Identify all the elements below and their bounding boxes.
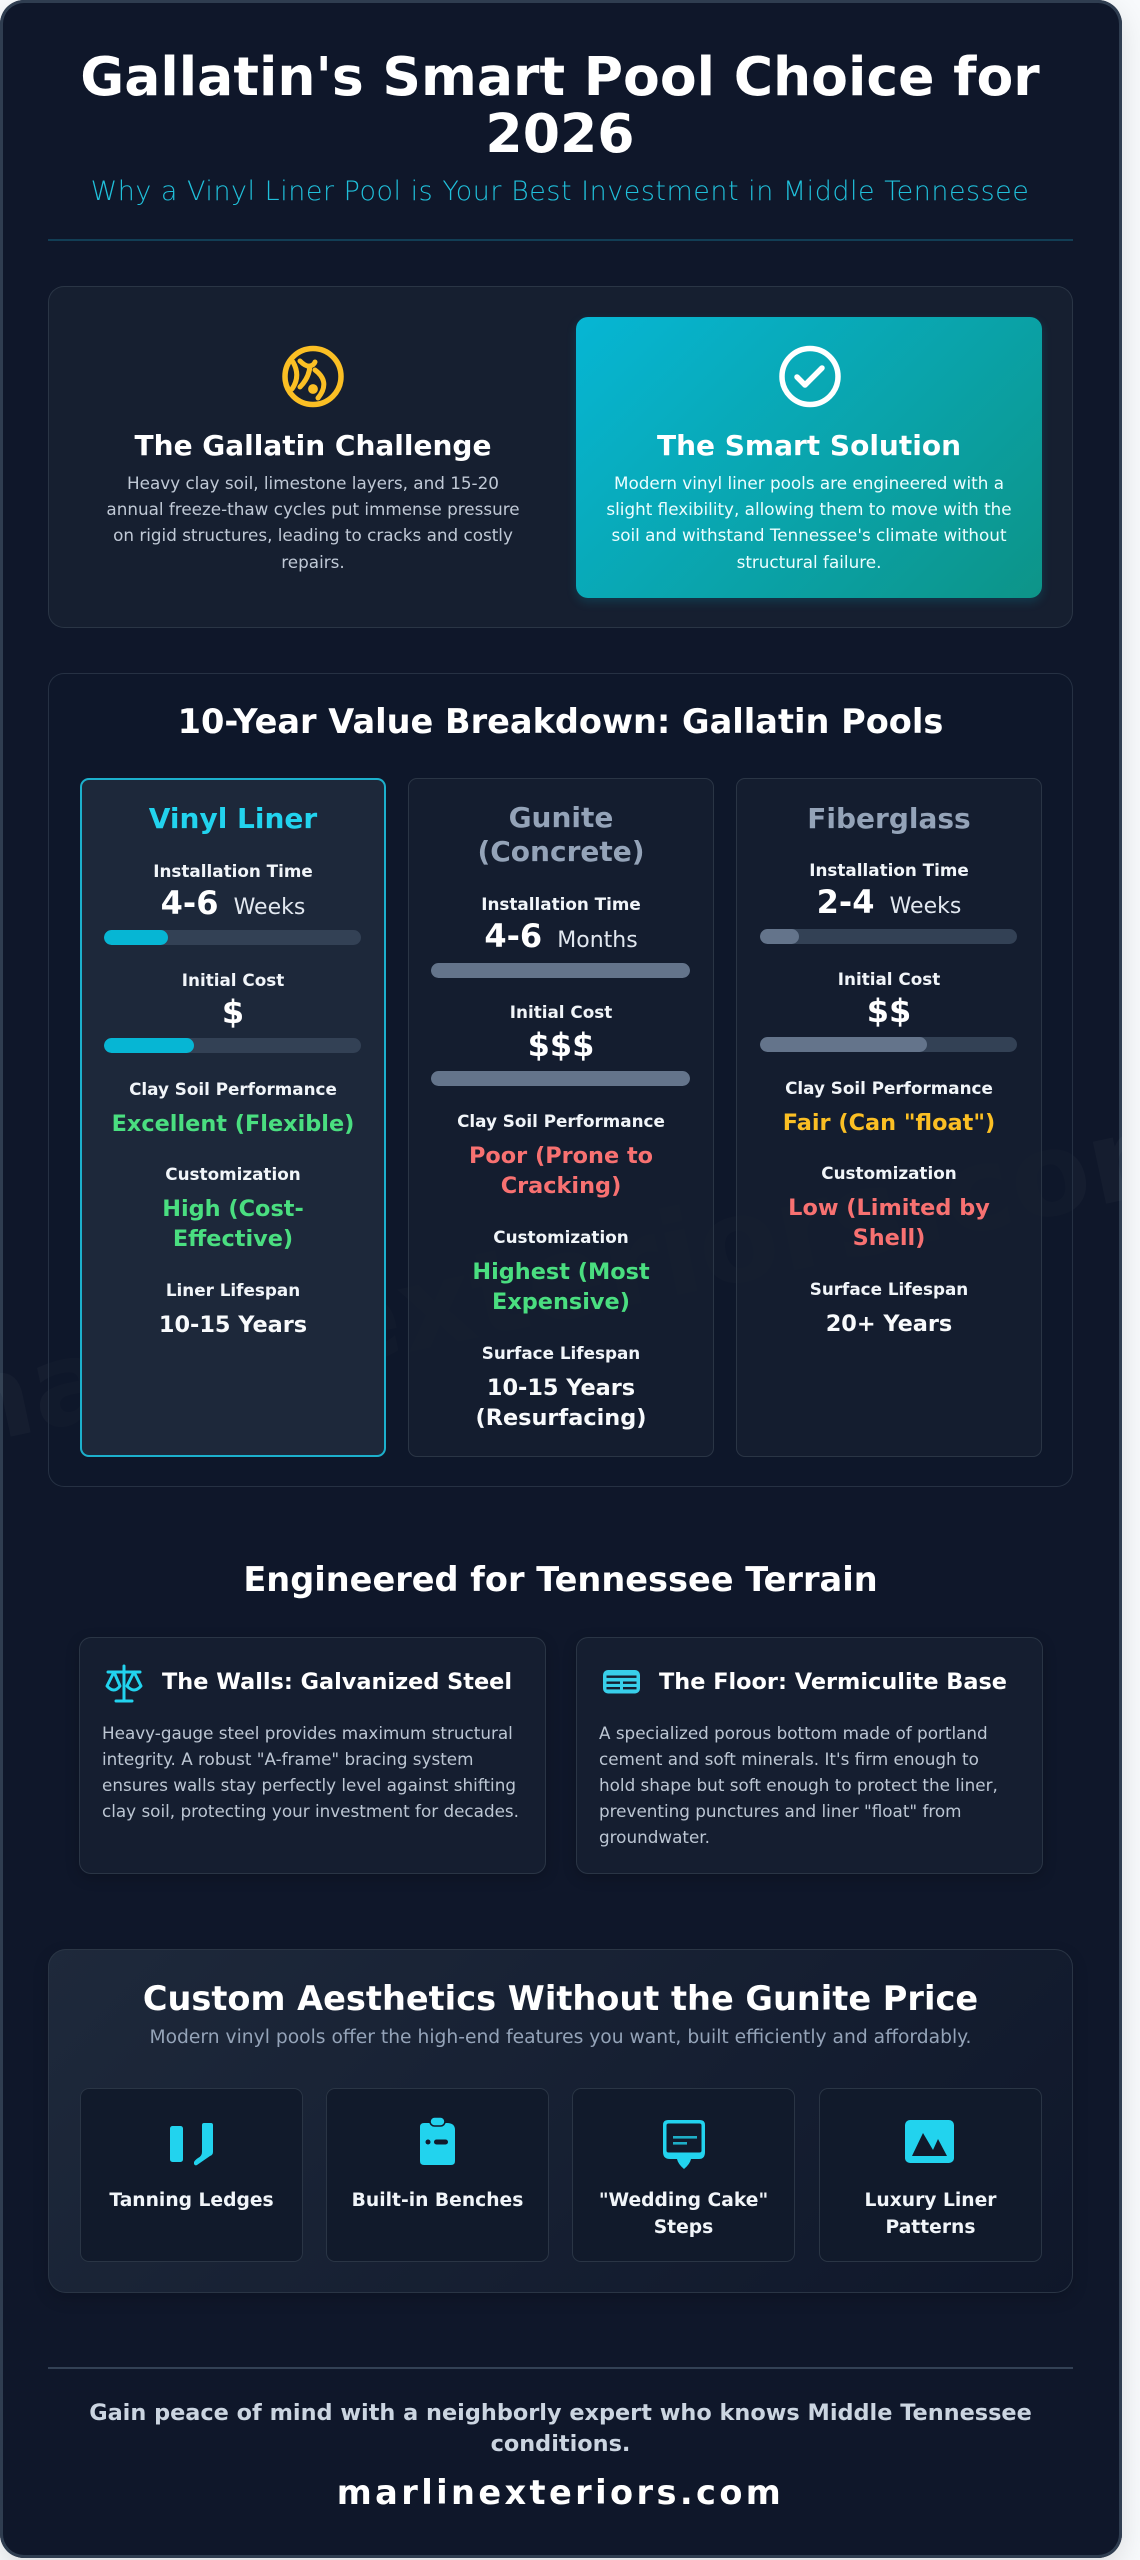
- column: gunite: Expensive): [492, 1289, 630, 1315]
- column: gunite: Highest (Most: [472, 1259, 650, 1285]
- column: fiberglass: Shell): [853, 1225, 925, 1251]
- metric: installation time: Installation Time: [809, 860, 969, 880]
- metric: initial cost: Initial Cost: [510, 1002, 612, 1022]
- text: [106, 473, 520, 572]
- text: [599, 1723, 998, 1847]
- name: [477, 801, 645, 868]
- label: Patterns: [886, 2216, 976, 2238]
- text: cement and soft minerals. It's firm enough to: [599, 1749, 979, 1769]
- column: gunite: [408, 778, 714, 1457]
- heading: The Smart Solution: [657, 429, 961, 462]
- label: "Wedding Cake": [599, 2190, 768, 2211]
- text: repairs.: [281, 552, 345, 572]
- metric: surface lifespan: Surface Lifespan: [482, 1343, 640, 1363]
- header: [80, 45, 1040, 207]
- column: fiberglass: 2-4 Weeks: [817, 883, 961, 921]
- panel: challenge and solution: [48, 286, 1073, 628]
- column: fiberglass: Low (Limited by: [788, 1195, 990, 1221]
- title: 2026: [485, 102, 635, 165]
- text: preventing punctures and liner "float" from: [599, 1801, 962, 1821]
- metric: initial cost: Initial Cost: [182, 970, 284, 990]
- card: the smart solution: [576, 317, 1042, 598]
- metric: clay soil performance: Clay Soil Performance: [457, 1111, 665, 1131]
- column: gunite: 10-15 Years: [487, 1375, 635, 1401]
- label: [599, 2190, 768, 2238]
- name: (Concrete): [477, 835, 645, 868]
- text: hold shape but soft enough to protect the liner,: [599, 1775, 998, 1795]
- icon: layered floor: [603, 1670, 640, 1694]
- column: fiberglass: $$: [867, 992, 911, 1030]
- text: Modern vinyl liner pools are engineered with a: [614, 473, 1004, 493]
- icon: check circle: [779, 346, 841, 408]
- section: engineered for Tennessee terrain: [79, 1560, 1043, 1874]
- column: gunite: (Resurfacing): [476, 1405, 646, 1431]
- metric: installation time: Installation Time: [153, 861, 313, 881]
- icon: scales: [106, 1664, 142, 1702]
- heading: The Gallatin Challenge: [135, 429, 491, 462]
- label: Luxury Liner: [864, 2190, 996, 2211]
- heading: The Walls: Galvanized Steel: [162, 1669, 512, 1695]
- text: clay soil, protecting your investment for decades.: [102, 1801, 519, 1821]
- column: vinyl liner: 4-6 Weeks: [161, 884, 305, 922]
- text: [102, 1723, 519, 1821]
- name: Gunite: [509, 801, 613, 834]
- text: structural failure.: [737, 552, 881, 572]
- icon: steps: [663, 2120, 705, 2169]
- title: [80, 45, 1040, 165]
- label: Steps: [654, 2216, 713, 2238]
- column: vinyl liner: Effective): [173, 1226, 293, 1252]
- name: Vinyl Liner: [149, 802, 317, 835]
- text: annual freeze-thaw cycles put immense pressure: [106, 499, 520, 519]
- heading: 10-Year Value Breakdown: Gallatin Pools: [178, 702, 943, 741]
- column: gunite: $$$: [528, 1026, 594, 1064]
- closing message: Gain peace of mind with a neighborly expert who knows Middle Tennessee: [89, 2400, 1032, 2426]
- title: Gallatin's Smart Pool Choice for: [80, 45, 1040, 108]
- tile: tanning ledges: [80, 2088, 303, 2262]
- footer: [89, 2400, 1032, 2512]
- metric: customization: Customization: [493, 1227, 629, 1247]
- text: integrity. A robust "A-frame" bracing system: [102, 1749, 473, 1769]
- closing message: [89, 2400, 1032, 2457]
- column: vinyl liner: 10-15 Years: [159, 1312, 307, 1338]
- text: [606, 473, 1012, 572]
- subheading: Modern vinyl pools offer the high-end features you want, built efficiently and affordably.: [150, 2027, 971, 2048]
- heading: Custom Aesthetics Without the Gunite Price: [143, 1979, 978, 2018]
- icon: image pattern: [905, 2120, 954, 2163]
- column: gunite: Cracking): [501, 1173, 621, 1199]
- label: [864, 2190, 996, 2238]
- metric: customization: Customization: [165, 1164, 301, 1184]
- subtitle: Why a Vinyl Liner Pool is Your Best Investment in Middle Tennessee: [91, 176, 1029, 207]
- label: Built-in Benches: [352, 2190, 523, 2211]
- metric: customization: Customization: [821, 1163, 957, 1183]
- metric: installation time: Installation Time: [481, 894, 641, 914]
- panel: custom aesthetics: [48, 1949, 1073, 2293]
- column: vinyl liner: $: [222, 993, 244, 1031]
- column: fiberglass: [736, 778, 1042, 1457]
- tile: built-in benches: [326, 2088, 549, 2262]
- metric: surface lifespan: Surface Lifespan: [810, 1279, 968, 1299]
- text: slight flexibility, allowing them to move with the: [606, 499, 1012, 519]
- column: fiberglass: 20+ Years: [826, 1311, 952, 1337]
- column: vinyl liner: High (Cost-: [162, 1196, 304, 1222]
- website: marlinexteriors.com: [337, 2473, 784, 2512]
- column: gunite: Poor (Prone to: [469, 1143, 653, 1169]
- text: groundwater.: [599, 1827, 710, 1847]
- tile: luxury liner patterns: [819, 2088, 1042, 2262]
- tile: wedding cake steps: [572, 2088, 795, 2262]
- metric: initial cost: Initial Cost: [838, 969, 940, 989]
- heading: Engineered for Tennessee Terrain: [243, 1560, 878, 1599]
- panel: 10-year value breakdown: [48, 673, 1073, 1487]
- column: vinyl liner: [80, 778, 386, 1457]
- text: Heavy clay soil, limestone layers, and 15-20: [127, 473, 499, 493]
- text: A specialized porous bottom made of portland: [599, 1723, 988, 1743]
- text: ensures walls stay perfectly level against shifting: [102, 1775, 516, 1795]
- icon: clay soil gauge: [282, 346, 344, 408]
- name: Fiberglass: [807, 802, 971, 835]
- metric: liner lifespan: Liner Lifespan: [166, 1280, 300, 1300]
- text: soil and withstand Tennessee's climate without: [611, 525, 1007, 545]
- label: Tanning Ledges: [109, 2190, 274, 2211]
- text: Heavy-gauge steel provides maximum structural: [102, 1723, 513, 1743]
- icon: clipboard bench: [420, 2118, 455, 2165]
- metric: clay soil performance: Clay Soil Performance: [129, 1079, 337, 1099]
- column: gunite: 4-6 Months: [484, 917, 638, 955]
- metric: clay soil performance: Clay Soil Performance: [785, 1078, 993, 1098]
- card: floor: [576, 1637, 1043, 1874]
- column: vinyl liner: Excellent (Flexible): [112, 1111, 354, 1137]
- closing message: conditions.: [491, 2431, 630, 2457]
- card: the Gallatin challenge: [106, 346, 520, 572]
- column: fiberglass: Fair (Can "float"): [783, 1110, 995, 1136]
- icon: ledges: [170, 2123, 213, 2166]
- heading: The Floor: Vermiculite Base: [659, 1669, 1007, 1695]
- card: walls: [79, 1637, 546, 1874]
- text: on rigid structures, leading to cracks and costly: [113, 525, 513, 545]
